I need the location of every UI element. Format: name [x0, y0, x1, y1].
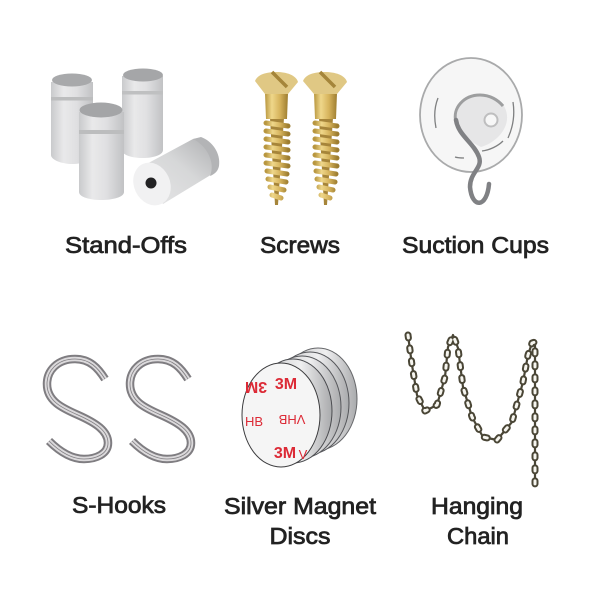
front cylinder	[79, 102, 124, 200]
back right cylinder	[122, 68, 163, 158]
adhesive liner print: VHB	[279, 412, 305, 427]
label: Screws: Screws	[260, 232, 340, 258]
icon: hanging chain	[408, 335, 535, 485]
lying cylinder	[126, 137, 219, 212]
icon: suction cup	[420, 58, 522, 203]
right hook	[130, 359, 191, 459]
adhesive liner print	[245, 376, 308, 462]
icon: silver magnet discs	[242, 348, 357, 467]
label: Hanging Chain: Hanging	[431, 493, 523, 519]
adhesive liner print: 3M	[245, 378, 267, 395]
icon: S-hooks	[47, 359, 191, 459]
label: Silver Magnet Discs: Silver Magnet	[224, 493, 377, 519]
label: Hanging Chain	[431, 493, 523, 549]
icon: stand-offs	[51, 68, 219, 212]
adhesive liner print: 3M	[274, 445, 296, 462]
left hook	[47, 359, 108, 459]
right screw	[303, 72, 347, 205]
label: Silver Magnet Discs: Discs	[270, 523, 330, 549]
adhesive liner print: HB	[245, 414, 263, 429]
label: Suction Cups: Suction Cups	[402, 232, 549, 258]
label: Hanging Chain: Chain	[447, 523, 509, 549]
label: S-Hooks: S-Hooks	[72, 492, 166, 518]
icon: brass screws	[255, 72, 347, 205]
left screw	[255, 72, 298, 205]
label: Stand-Offs: Stand-Offs	[65, 232, 187, 258]
adhesive liner print: 3M	[275, 376, 297, 393]
back left cylinder	[51, 74, 93, 164]
label: Silver Magnet Discs	[224, 493, 377, 549]
adhesive liner print: V	[299, 447, 308, 462]
